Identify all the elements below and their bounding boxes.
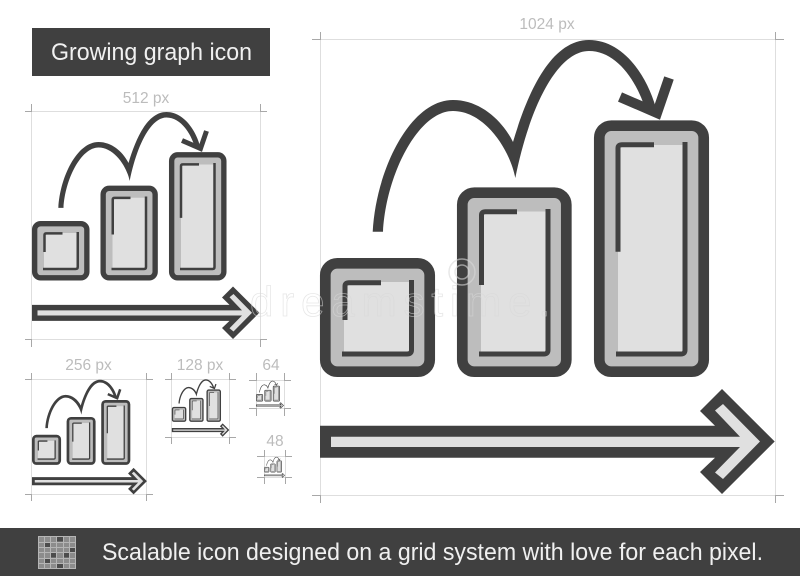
label: 48: 48 [266,433,284,450]
label: 1024 px: 1024 px [519,16,575,33]
panel: 128 px icon preview [165,357,236,444]
panel: 64 px icon preview [249,357,291,416]
label: 64: 64 [262,357,280,374]
panel: 48 px icon preview [257,433,292,484]
icon: growing graph 48 [264,457,285,478]
icon: growing graph 64 [256,381,284,409]
title banner: Growing graph icon [51,39,252,66]
icon: growing graph large [320,40,775,494]
icon: growing graph 256 [32,380,147,494]
panel: 256 px icon preview [25,357,153,501]
icon: pixel grid [38,536,76,569]
title banner [32,28,270,76]
tagline: Scalable icon designed on a grid system with love for each pixel. [102,539,763,566]
label: 128 px: 128 px [177,357,224,374]
label: 512 px: 512 px [123,90,170,107]
icon: growing graph 512 [32,112,259,339]
watermark: dreamstime. [250,278,550,325]
icon: growing graph 128 [172,379,229,437]
footer bar [0,528,800,576]
label: 256 px: 256 px [65,357,112,374]
panel: 512 px icon preview [25,90,267,347]
